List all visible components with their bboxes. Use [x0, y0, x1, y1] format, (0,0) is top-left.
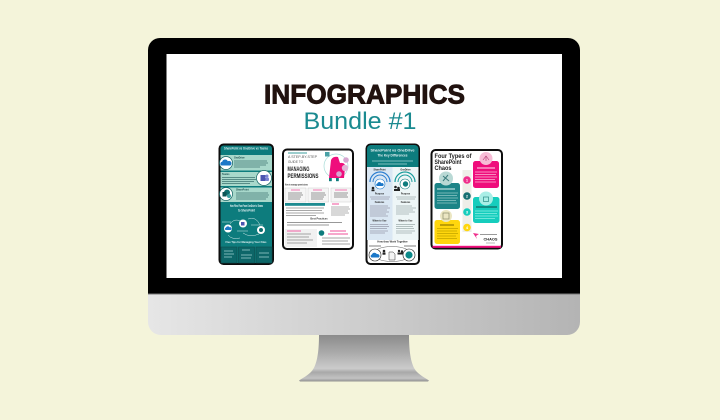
pink side note — [331, 204, 350, 215]
header band: The Key Differences — [378, 154, 408, 158]
monitor screen — [166, 54, 562, 278]
icon: SharePoint node — [257, 226, 265, 234]
heading: together: How they Work Together — [377, 240, 408, 244]
three option boxes — [285, 188, 351, 202]
column: OneDrive — [392, 167, 418, 240]
panel: dark teal chaos type — [434, 172, 460, 209]
card title: Chaos — [434, 166, 452, 172]
guide heading: A STEP-BY-STEP — [288, 155, 317, 159]
icon: users — [398, 250, 404, 254]
card: SharePoint vs OneDrive key differences — [366, 144, 419, 264]
column: SharePoint: Features — [375, 201, 385, 204]
number badges: 3 — [466, 210, 469, 214]
icon: OneDrive node — [224, 224, 232, 232]
panel: yellow chaos type — [434, 210, 460, 244]
guide heading: PERMISSIONS — [288, 173, 319, 180]
card title: SharePoint — [434, 160, 462, 166]
number badges: 1 — [466, 178, 469, 182]
monitor chin — [148, 294, 580, 335]
column: OneDrive: Purpose — [401, 194, 411, 196]
section heading: How to manage permissions — [285, 184, 308, 186]
teal section bar — [285, 203, 325, 206]
panel: turquoise chaos type — [473, 192, 500, 223]
icon: SharePoint — [220, 188, 232, 200]
panel: Teams: Teams — [222, 173, 230, 176]
column: SharePoint: SharePoint — [373, 168, 386, 172]
panel: OneDrive: OneDrive — [234, 156, 245, 160]
heading: file flow: to SharePoint — [238, 208, 256, 212]
number badges — [463, 176, 471, 231]
body text block — [286, 208, 324, 216]
icon: user — [382, 250, 386, 255]
panel: magenta chaos type — [473, 152, 499, 188]
column: SharePoint — [367, 167, 392, 240]
icon: SharePoint with arcs — [395, 172, 415, 189]
icon: OneDrive cloud — [220, 156, 232, 170]
column: OneDrive: When to Use — [399, 220, 413, 222]
panel: SharePoint: SharePoint — [236, 188, 249, 192]
card heading: SharePoint vs OneDrive vs Teams — [224, 146, 268, 150]
icon: Teams node — [239, 220, 247, 228]
column: SharePoint: Purpose — [375, 194, 385, 196]
column: SharePoint: When to Use — [373, 220, 387, 222]
best practice lines — [287, 222, 342, 225]
column: OneDrive: Features — [401, 201, 411, 204]
monitor stand — [299, 335, 429, 382]
card: four types of SharePoint chaos — [432, 150, 502, 248]
card title: Four Types of — [434, 154, 472, 160]
illustration: pink figure — [324, 152, 349, 181]
flow diagram — [222, 218, 265, 239]
guide heading: GUIDE TO — [288, 160, 303, 164]
title: INFOGRAPHICS — [264, 80, 465, 110]
guide heading: MANAGING — [288, 166, 310, 173]
header band: SharePoint vs OneDrive — [370, 148, 415, 152]
card: managing permissions guide — [283, 150, 353, 249]
number badges: 2 — [466, 194, 469, 198]
icon: cloud — [369, 249, 381, 261]
tip boxes — [221, 247, 272, 263]
heading: file flow: How Files Flow From OneDrive to Teams — [230, 204, 263, 208]
monitor bezel — [148, 38, 580, 294]
icon: Teams — [256, 170, 272, 186]
number badges: 4 — [466, 225, 469, 230]
lower right box — [319, 230, 350, 244]
subtitle: Bundle #1 — [304, 108, 416, 135]
workflow diagram — [369, 246, 416, 262]
guide heading — [288, 153, 319, 180]
header band — [367, 145, 418, 167]
lower left box — [285, 229, 317, 247]
icon: document — [389, 252, 395, 260]
background connector — [462, 170, 472, 232]
best practice heading: Best Practices — [310, 218, 328, 220]
icon: SharePoint — [403, 249, 415, 261]
logo: chaos: CHAOS — [484, 236, 498, 242]
icon: cloud with arcs — [370, 172, 390, 189]
card: SharePoint vs OneDrive vs Teams — [220, 144, 273, 264]
column: OneDrive: OneDrive — [400, 170, 411, 172]
heading: tips: Five Tips for Managing Your Files — [226, 240, 267, 244]
